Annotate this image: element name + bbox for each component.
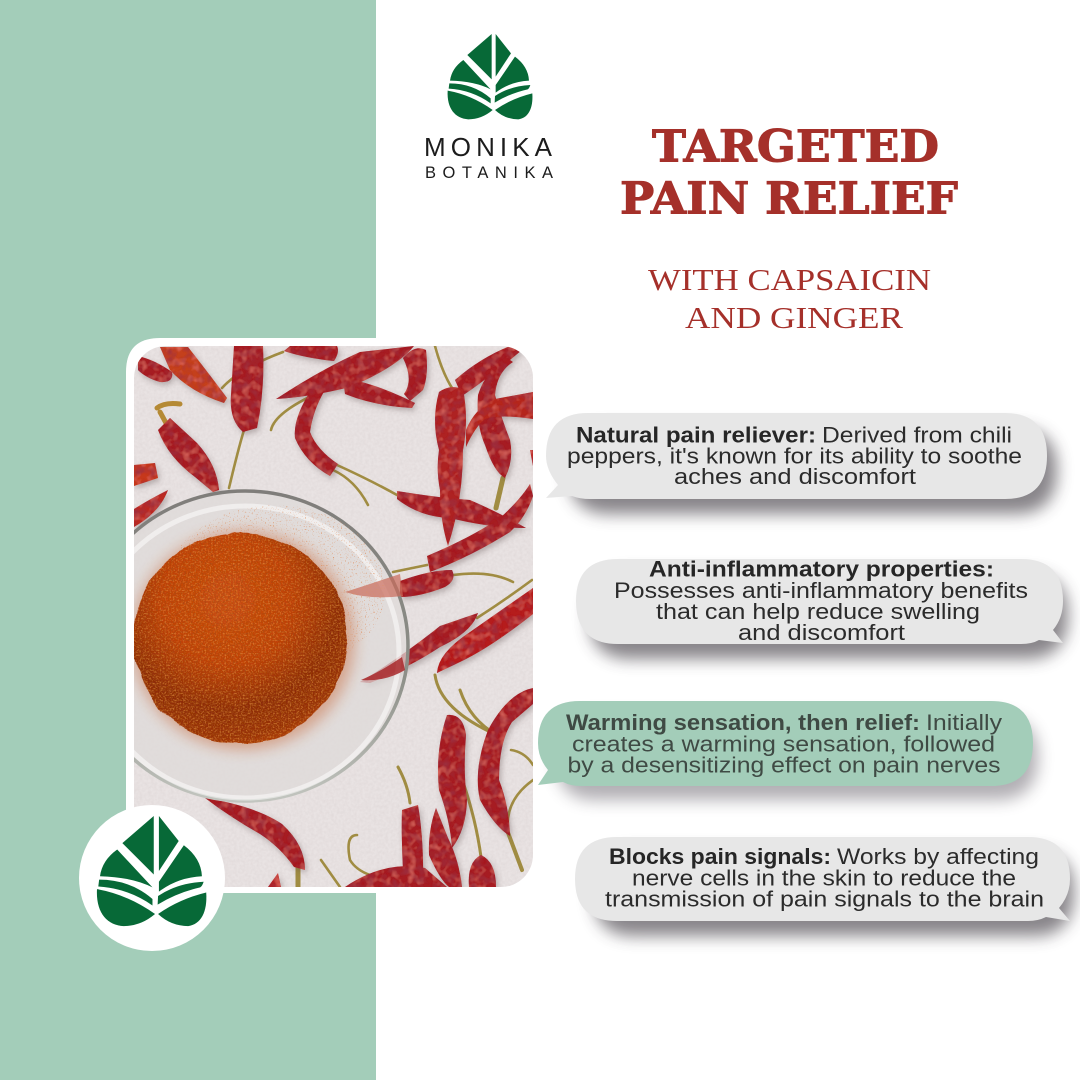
callout: natural pain reliever: aches and discomfort	[674, 464, 916, 489]
callout: warming sensation (highlighted): by a desensitizing effect on pain nerves	[568, 752, 1000, 778]
title: PAIN RELIEF	[620, 174, 958, 224]
callout: anti-inflammatory properties: and discomfort	[738, 620, 905, 645]
brand logo	[424, 34, 553, 182]
faded pepper tip seen through the glass	[361, 657, 405, 680]
callout: anti-inflammatory properties: Anti-inflammatory properties:	[649, 556, 994, 582]
powder specks	[176, 505, 384, 652]
title	[620, 122, 958, 224]
photo: chili peppers and bowl of chili powder	[134, 346, 533, 887]
chili powder mound	[133, 533, 347, 743]
panel: white photo frame	[126, 338, 376, 893]
panel: green background	[0, 0, 376, 1080]
callout: natural pain reliever: peppers, it's known for its ability to soothe	[567, 444, 1022, 468]
badge: round logo	[79, 805, 225, 951]
callout: blocks pain signals: Blocks pain signals:	[609, 844, 831, 869]
subtitle: AND GINGER	[685, 300, 903, 335]
subtitle: WITH CAPSAICIN	[648, 262, 931, 297]
glass bowl	[134, 489, 410, 803]
callout: warming sensation (highlighted): Initially	[926, 710, 1002, 735]
title: TARGETED	[652, 122, 939, 172]
callout: natural pain reliever: Natural pain reliever:	[576, 422, 816, 448]
stems	[157, 346, 533, 887]
peppers	[134, 346, 533, 887]
brand name: BOTANIKA	[425, 164, 553, 182]
icon: leaf	[448, 34, 532, 119]
callout: warming sensation (highlighted): creates a warming sensation, followed	[572, 732, 995, 756]
brand name	[424, 132, 553, 182]
callout: blocks pain signals: Works by affecting	[837, 844, 1039, 869]
brand name: MONIKA	[424, 132, 553, 162]
callout: natural pain reliever	[546, 413, 1057, 514]
callout: natural pain reliever: Derived from chili	[822, 422, 1012, 448]
powder haze	[131, 530, 355, 750]
callout: blocks pain signals	[575, 837, 1074, 936]
callout: warming sensation (highlighted)	[538, 701, 1038, 800]
callout: anti-inflammatory properties: Possesses anti-inflammatory benefits	[614, 578, 1028, 603]
subtitle	[648, 262, 931, 335]
callout: blocks pain signals: nerve cells in the skin to reduce the	[632, 866, 1016, 890]
callout: warming sensation (highlighted): Warming sensation, then relief:	[566, 710, 920, 735]
callout: blocks pain signals: transmission of pain signals to the brain	[605, 886, 1044, 912]
callout: anti-inflammatory properties: that can help reduce swelling	[656, 599, 980, 624]
faded pepper seen through the glass	[345, 574, 403, 597]
callout: anti-inflammatory properties	[576, 556, 1068, 659]
